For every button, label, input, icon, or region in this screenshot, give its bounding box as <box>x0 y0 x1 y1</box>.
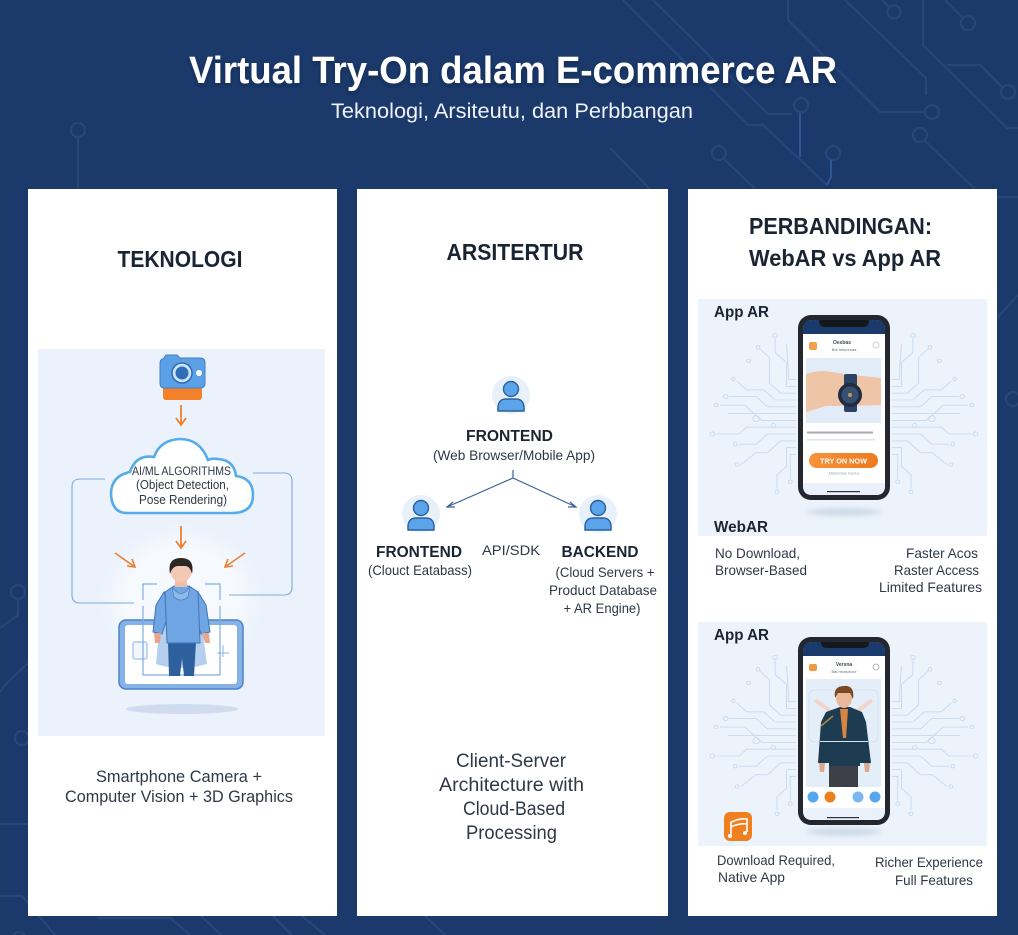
button: try on now <box>809 453 878 468</box>
text: app ar right: Richer Experience <box>875 854 983 870</box>
text lines <box>807 432 875 476</box>
text: webar right <box>879 545 982 595</box>
text: app ar left: Native App <box>718 869 785 885</box>
arrow: camera to cloud <box>176 405 186 425</box>
panel: perbandingan <box>688 189 997 916</box>
caption: Client-Server <box>456 751 567 772</box>
text: frontend left: FRONTEND <box>376 544 462 561</box>
bright circuit traces <box>800 113 840 185</box>
app header <box>809 340 879 352</box>
scan frame <box>143 584 220 675</box>
virtual cape <box>156 620 207 668</box>
caption: Architecture with <box>439 775 584 796</box>
text: webar left: Browser-Based <box>715 562 807 578</box>
hands <box>154 633 210 643</box>
caption: Processing <box>466 823 557 844</box>
phone shadow <box>806 829 882 835</box>
text: AI/ML algorithms <box>132 464 231 507</box>
text: webar right: Faster Acos <box>906 545 978 561</box>
text: AI/ML algorithms: (Object Detection, <box>136 478 229 492</box>
icon: app <box>724 812 752 841</box>
tablet <box>119 620 243 689</box>
circuit traces <box>710 333 978 494</box>
text: frontend top <box>433 428 595 463</box>
neck <box>175 577 187 587</box>
panel: arsitektur <box>357 189 668 916</box>
text: api sdk: API/SDK <box>482 542 541 558</box>
text: webar right: Raster Access <box>894 562 979 578</box>
app header: Bat reitsorsaa <box>832 347 857 352</box>
arms <box>153 592 210 634</box>
icon: user top <box>492 376 530 414</box>
text: webar right: Limited Features <box>879 579 982 595</box>
subtitle: Teknologi, Arsiteutu, dan Perbbangan <box>331 100 693 123</box>
app header: Versna <box>836 662 852 668</box>
button: try on now: TRY ON NOW <box>820 456 868 466</box>
app header: Bat reutsdrzur <box>831 669 857 674</box>
text: backend: Product Database <box>549 582 657 598</box>
text lines: Alkatamaan hasnua <box>829 472 860 476</box>
icon: camera <box>160 355 205 400</box>
person with virtual garment <box>153 558 210 676</box>
buttons row <box>808 792 880 802</box>
text: frontend left: (Clouct Eatabass) <box>368 562 472 578</box>
caption <box>65 767 293 806</box>
app header: Oesbas <box>833 340 851 346</box>
arrows: split <box>447 470 576 507</box>
panel: teknologi <box>28 189 337 916</box>
text: frontend top: FRONTEND <box>466 428 553 445</box>
phone <box>798 315 890 500</box>
legs <box>168 642 196 676</box>
text: backend: BACKEND <box>562 544 638 561</box>
phone shadow <box>806 509 882 515</box>
text: app ar left <box>717 852 835 885</box>
heading: teknologi: TEKNOLOGI <box>118 246 242 272</box>
icon: user left <box>402 495 440 533</box>
illustration: jacket try-on <box>698 622 987 846</box>
text: frontend top: (Web Browser/Mobile App) <box>433 447 595 463</box>
app header <box>809 662 879 674</box>
heading: perbandingan: WebAR vs App AR <box>749 245 941 271</box>
text: app ar right <box>875 854 983 888</box>
text: backend <box>549 544 657 616</box>
torso <box>165 586 200 643</box>
icon: cloud <box>111 439 253 513</box>
illustration: AR pipeline <box>38 349 325 736</box>
soft glow <box>111 535 251 665</box>
text: app ar right: Full Features <box>895 872 973 888</box>
label: app ar: App AR <box>714 304 769 321</box>
connector: left feedback loop <box>72 479 134 603</box>
arrow: cloud to person <box>176 526 186 548</box>
phone <box>798 637 890 825</box>
caption: Smartphone Camera + <box>96 767 262 786</box>
text: frontend left <box>368 544 472 578</box>
label: webar: WebAR <box>714 519 768 536</box>
title: Virtual Try-On dalam E-commerce AR <box>189 50 837 92</box>
text: backend: + AR Engine) <box>564 600 640 616</box>
label: app ar: App AR <box>714 627 769 644</box>
caption: Computer Vision + 3D Graphics <box>65 787 293 806</box>
connector: right feedback loop <box>229 473 292 595</box>
text: backend: (Cloud Servers + <box>556 564 654 580</box>
text: webar left <box>715 545 807 578</box>
watch photo <box>806 358 881 423</box>
illustration: watch try-on <box>698 299 987 536</box>
heading: arsitektur: ARSITERTUR <box>446 239 584 265</box>
text: AI/ML algorithms: Pose Rendering) <box>139 493 227 507</box>
shadow <box>126 704 238 714</box>
hair <box>169 558 193 574</box>
heading: perbandingan: PERBANDINGAN: <box>749 213 932 239</box>
caption: Cloud-Based <box>463 799 565 820</box>
model photo <box>806 679 881 787</box>
caption <box>439 751 584 844</box>
arrow: left to person <box>115 553 135 567</box>
text: app ar left: Download Required, <box>717 852 835 868</box>
text: AI/ML algorithms: AI/ML ALGORITHMS <box>132 464 231 478</box>
text: webar left: No Download, <box>715 545 800 561</box>
icon: user right <box>579 495 617 533</box>
arrow: right to person <box>225 553 245 567</box>
face <box>170 560 192 582</box>
circuit traces <box>710 655 978 816</box>
heading: perbandingan <box>749 213 941 271</box>
collar <box>172 587 190 600</box>
